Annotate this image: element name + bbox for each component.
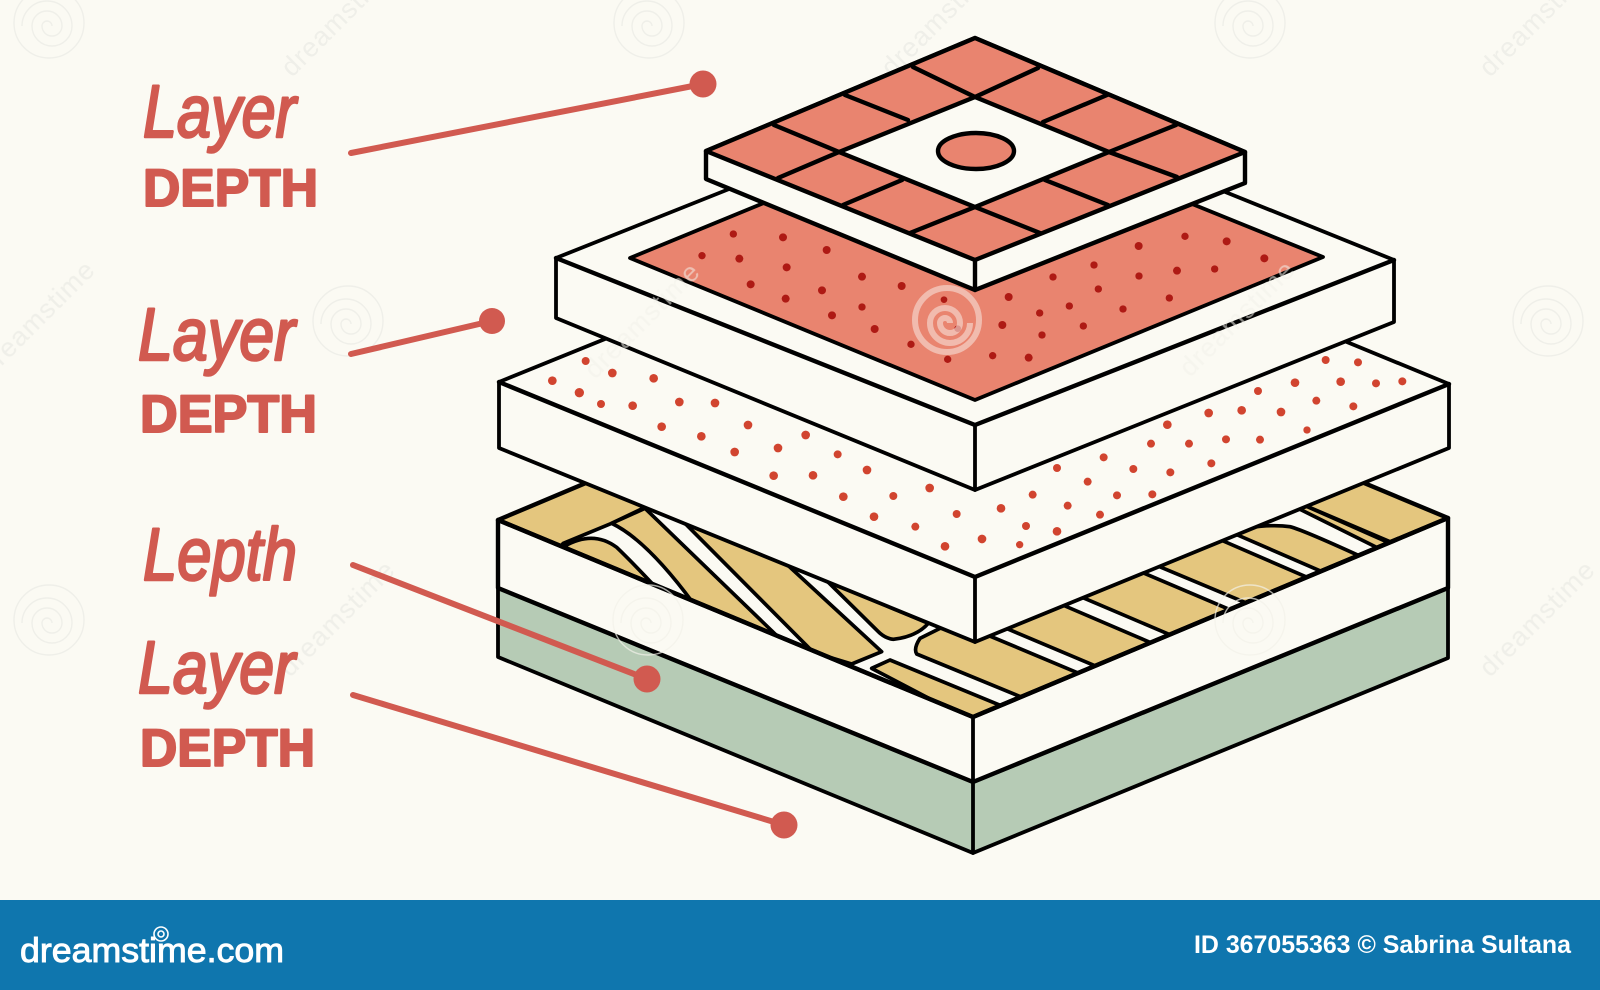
label 2: Layer DEPTH: Layer [138,293,298,376]
layer 4: tan paved layer [496,482,1450,784]
dots right [978,356,1406,548]
label 1: Layer DEPTH: DEPTH [143,159,318,218]
layer 5: green base block [498,588,1448,853]
text: dreamstime [578,256,706,384]
dots left [698,230,961,363]
text: dreamstime [1473,554,1600,682]
leader line 3 [353,565,660,692]
layer 2: white frame with red dotted inset [556,91,1394,490]
dots right [989,233,1268,362]
label 4: Layer DEPTH: Layer [138,626,298,709]
leader line 2 [351,308,505,354]
text: dreamstime [1173,254,1301,382]
label 4: Layer DEPTH [138,626,315,778]
dots left [548,357,961,551]
label 2: Layer DEPTH: DEPTH [140,385,317,444]
icon: logo spiral [154,927,168,941]
centre square [839,97,1109,207]
label 4: Layer DEPTH: DEPTH [140,719,315,778]
centre circle [938,133,1014,169]
tile grid lines [774,67,1177,233]
watermark spiral [915,288,979,352]
footer credit: ID 367055363 © Sabrina Sultana [1194,931,1572,959]
text: dreamstime [273,554,401,682]
layer 1: red tile slab with centre circle [706,38,1245,290]
layer stack diagram [490,38,1460,853]
label 2: Layer DEPTH [138,293,317,444]
footer logo text: dreamstime.com [20,932,284,970]
label 1: Layer DEPTH: Layer [143,70,299,153]
leader line 4 [353,695,798,838]
layer 3: dotted white slab [499,189,1449,642]
footer bar [0,900,1600,990]
label 1: Layer DEPTH [143,70,318,218]
label 3: Lepth: Lepth [143,513,297,596]
leader line 1 [351,70,716,153]
